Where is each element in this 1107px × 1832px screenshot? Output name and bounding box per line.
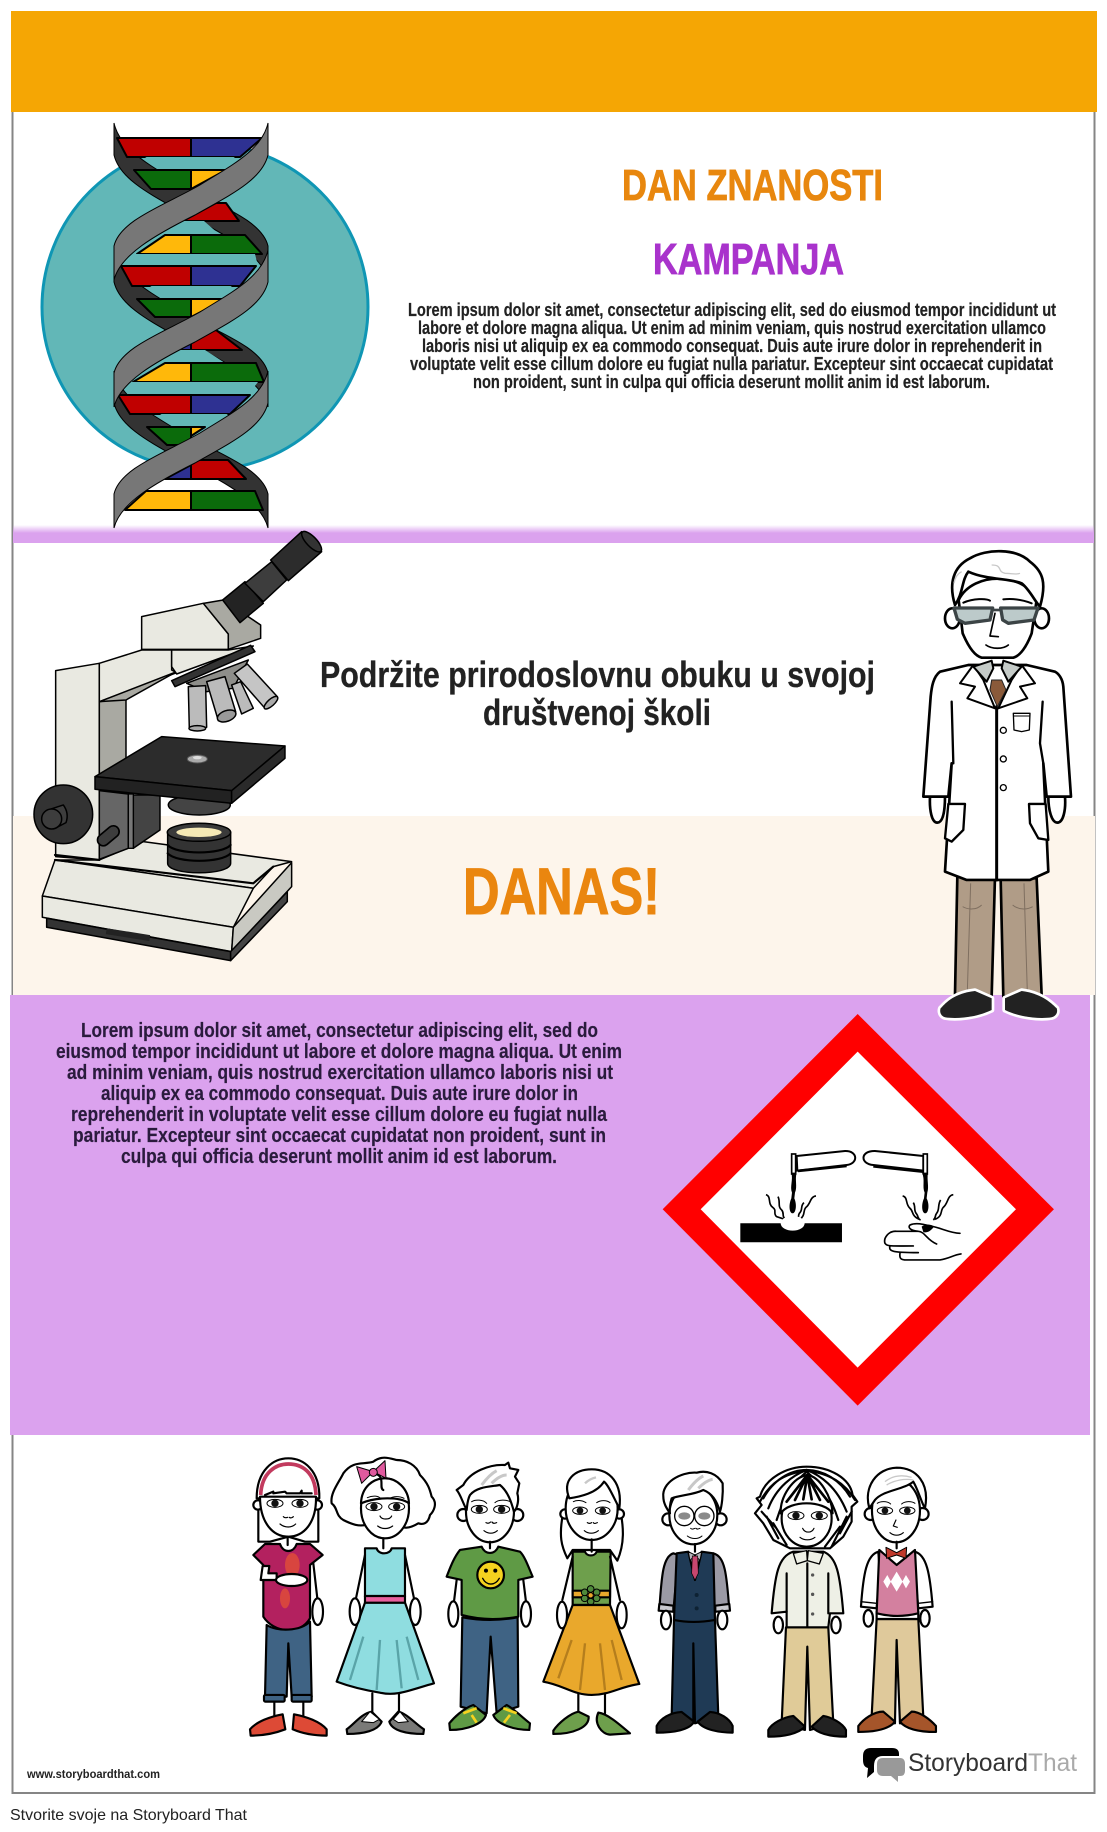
purple divider strip bbox=[13, 525, 1094, 543]
character: boy with smiley shirt bbox=[447, 1463, 533, 1730]
website url: www.storyboardthat.com bbox=[26, 1767, 160, 1781]
footer caption: Stvorite svoje na Storyboard That bbox=[10, 1807, 248, 1824]
purple panel paragraph: eiusmod tempor incididunt ut labore et dolore magna aliqua. Ut enim bbox=[56, 1041, 622, 1063]
logo: Storyboard That: That bbox=[1028, 1749, 1077, 1777]
purple panel paragraph: culpa qui officia deserunt mollit anim id est laborum. bbox=[121, 1146, 557, 1168]
character: boy with shaggy hair and cream shirt bbox=[755, 1467, 857, 1737]
character: scientist in lab coat bbox=[923, 551, 1071, 1018]
cream band bbox=[13, 816, 1095, 995]
orange header band bbox=[11, 11, 1097, 112]
purple panel bbox=[10, 995, 1090, 1435]
character: girl with orange skirt bbox=[543, 1469, 639, 1735]
character: girl with pink headband bbox=[250, 1458, 327, 1736]
icon: DNA helix on teal circle bbox=[42, 123, 368, 528]
purple panel paragraph bbox=[56, 1020, 622, 1168]
subheading: support science education: društvenoj školi bbox=[483, 692, 711, 733]
character: girl with curly hair and blue dress bbox=[331, 1458, 435, 1734]
subheading: support science education bbox=[320, 654, 875, 733]
purple panel paragraph: reprehenderit in voluptate velit esse cillum dolore eu fugiat nulla bbox=[71, 1104, 608, 1126]
characters: group of seven students bbox=[250, 1458, 936, 1737]
logo: Storyboard That: Storyboard bbox=[908, 1749, 1028, 1777]
heading: Dan znanosti: DAN ZNANOSTI bbox=[622, 161, 883, 210]
intro paragraph bbox=[408, 300, 1056, 392]
character: boy in navy suit and glasses bbox=[657, 1472, 733, 1733]
character: boy in pink argyle vest bbox=[858, 1468, 936, 1732]
icon: microscope bbox=[34, 529, 324, 961]
subheading: support science education: Podržite prirodoslovnu obuku u svojoj bbox=[320, 654, 875, 695]
intro paragraph: non proident, sunt in culpa qui officia deserunt mollit anim id est laborum. bbox=[473, 372, 990, 392]
purple panel paragraph: ad minim veniam, quis nostrud exercitation ullamco laboris nisi ut bbox=[67, 1062, 613, 1084]
purple panel paragraph: aliquip ex ea commodo consequat. Duis aute irure dolor in bbox=[101, 1083, 578, 1105]
heading: Danas: DANAS! bbox=[463, 854, 660, 928]
logo: Storyboard That bbox=[863, 1748, 1077, 1782]
icon: corrosive hazard diamond bbox=[663, 1014, 1054, 1406]
purple panel paragraph: Lorem ipsum dolor sit amet, consectetur adipiscing elit, sed do bbox=[81, 1020, 598, 1042]
heading: Kampanja: KAMPANJA bbox=[653, 235, 844, 284]
purple panel paragraph: pariatur. Excepteur sint occaecat cupidatat non proident, sunt in bbox=[73, 1125, 606, 1147]
